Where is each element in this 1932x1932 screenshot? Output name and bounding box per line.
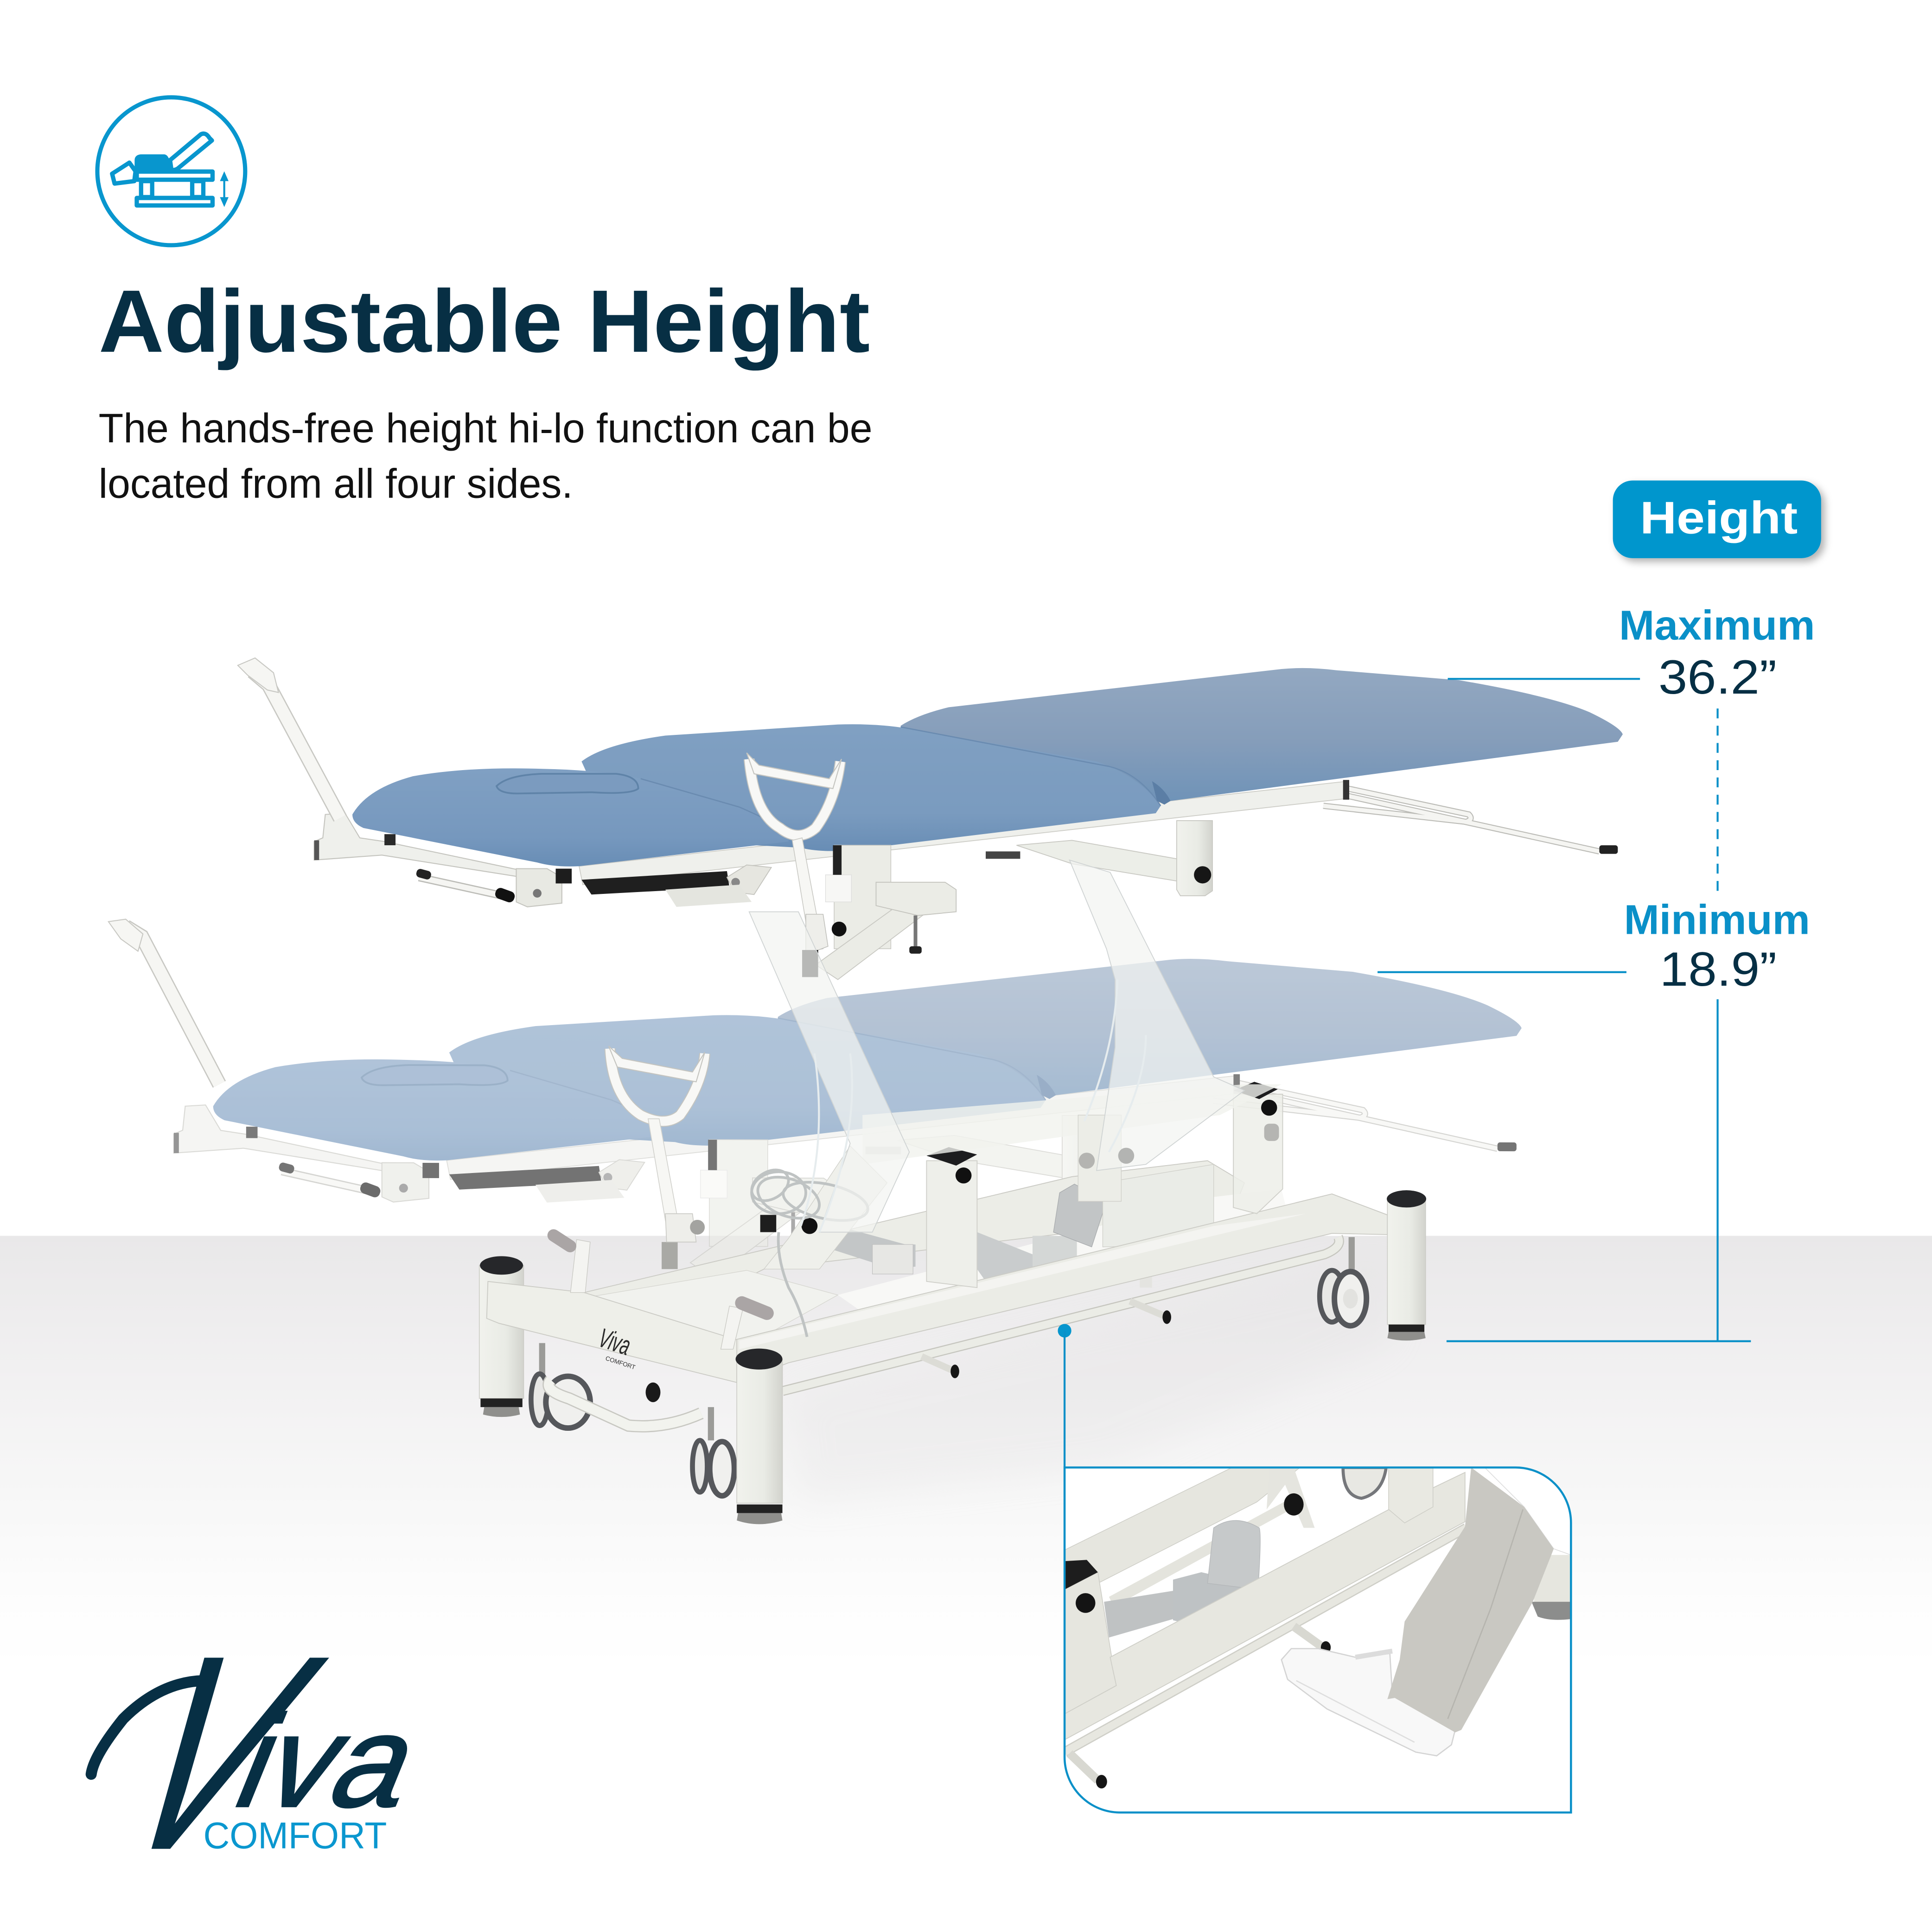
logo swash	[91, 1681, 203, 1774]
description	[99, 405, 873, 507]
white coat	[1485, 1467, 1571, 1555]
lift column left	[926, 1147, 977, 1288]
title: Adjustable Height	[99, 272, 870, 371]
actuator arm	[824, 1222, 916, 1269]
lower table, minimum height	[174, 956, 1522, 1281]
logo: iva	[217, 1689, 443, 1835]
front beam	[1065, 1473, 1465, 1740]
front long beam	[737, 1194, 1387, 1383]
bracket plate	[1103, 1164, 1214, 1247]
dimension lines	[1377, 679, 1751, 1341]
pedal joint and rear caster	[1267, 1467, 1315, 1528]
cross beam	[487, 1282, 746, 1383]
lower table head lever	[108, 919, 219, 1084]
rear beam	[1065, 1467, 1300, 1589]
back left caster	[531, 1343, 590, 1428]
front rod	[783, 1237, 1339, 1391]
rear table leg	[1534, 1555, 1571, 1607]
front left pillar	[736, 1349, 783, 1524]
height badge: Height	[1640, 492, 1798, 543]
foot loop handle	[548, 1380, 701, 1426]
inner deck	[587, 1270, 838, 1343]
column	[1065, 1572, 1116, 1714]
table logo: Viva	[595, 1323, 634, 1361]
logo: V	[66, 1598, 363, 1907]
upper hand rail	[746, 753, 847, 977]
left handle grips	[545, 1227, 776, 1349]
lift column right	[1233, 1082, 1282, 1214]
table glyph	[112, 134, 212, 205]
icon: adjustable table	[97, 97, 245, 245]
power cable coil	[746, 1164, 871, 1337]
logo: COMFORT	[203, 1815, 387, 1856]
description: The hands-free height hi-lo function can be	[99, 405, 873, 451]
lower carriage	[760, 1084, 1282, 1269]
under frame opening	[838, 1189, 1288, 1312]
maximum label: Maximum	[1619, 602, 1815, 649]
back left pillar	[479, 1256, 523, 1417]
right pillar	[1387, 1190, 1426, 1340]
minimum label	[1624, 896, 1810, 996]
maximum label	[1619, 602, 1815, 704]
back right caster	[1320, 1237, 1366, 1326]
front left caster	[693, 1407, 734, 1496]
table logo: COMFORT	[605, 1355, 636, 1371]
base frame	[479, 1082, 1426, 1524]
upper table, maximum height	[314, 668, 1623, 980]
maximum label: 36.2”	[1658, 650, 1777, 704]
floor	[0, 1236, 1932, 1667]
serial label	[873, 1244, 913, 1274]
shoe	[1282, 1649, 1455, 1756]
actuator	[1053, 1184, 1106, 1247]
table shadow	[789, 1257, 1392, 1503]
trousers	[1387, 1467, 1554, 1732]
lower table hand rail	[609, 1046, 705, 1269]
height badge	[1613, 480, 1821, 558]
back beam	[584, 1160, 1244, 1308]
upper head lever	[238, 658, 340, 818]
minimum label: 18.9”	[1660, 942, 1777, 996]
inset panel: foot pedal detail	[1065, 1467, 1571, 1812]
pedal rod	[1065, 1528, 1466, 1752]
translucent scissor supports	[749, 860, 1244, 1232]
minimum label: Minimum	[1624, 896, 1810, 943]
description: located from all four sides.	[99, 460, 573, 507]
actuator	[1104, 1591, 1173, 1638]
callout connector	[1058, 1324, 1071, 1467]
